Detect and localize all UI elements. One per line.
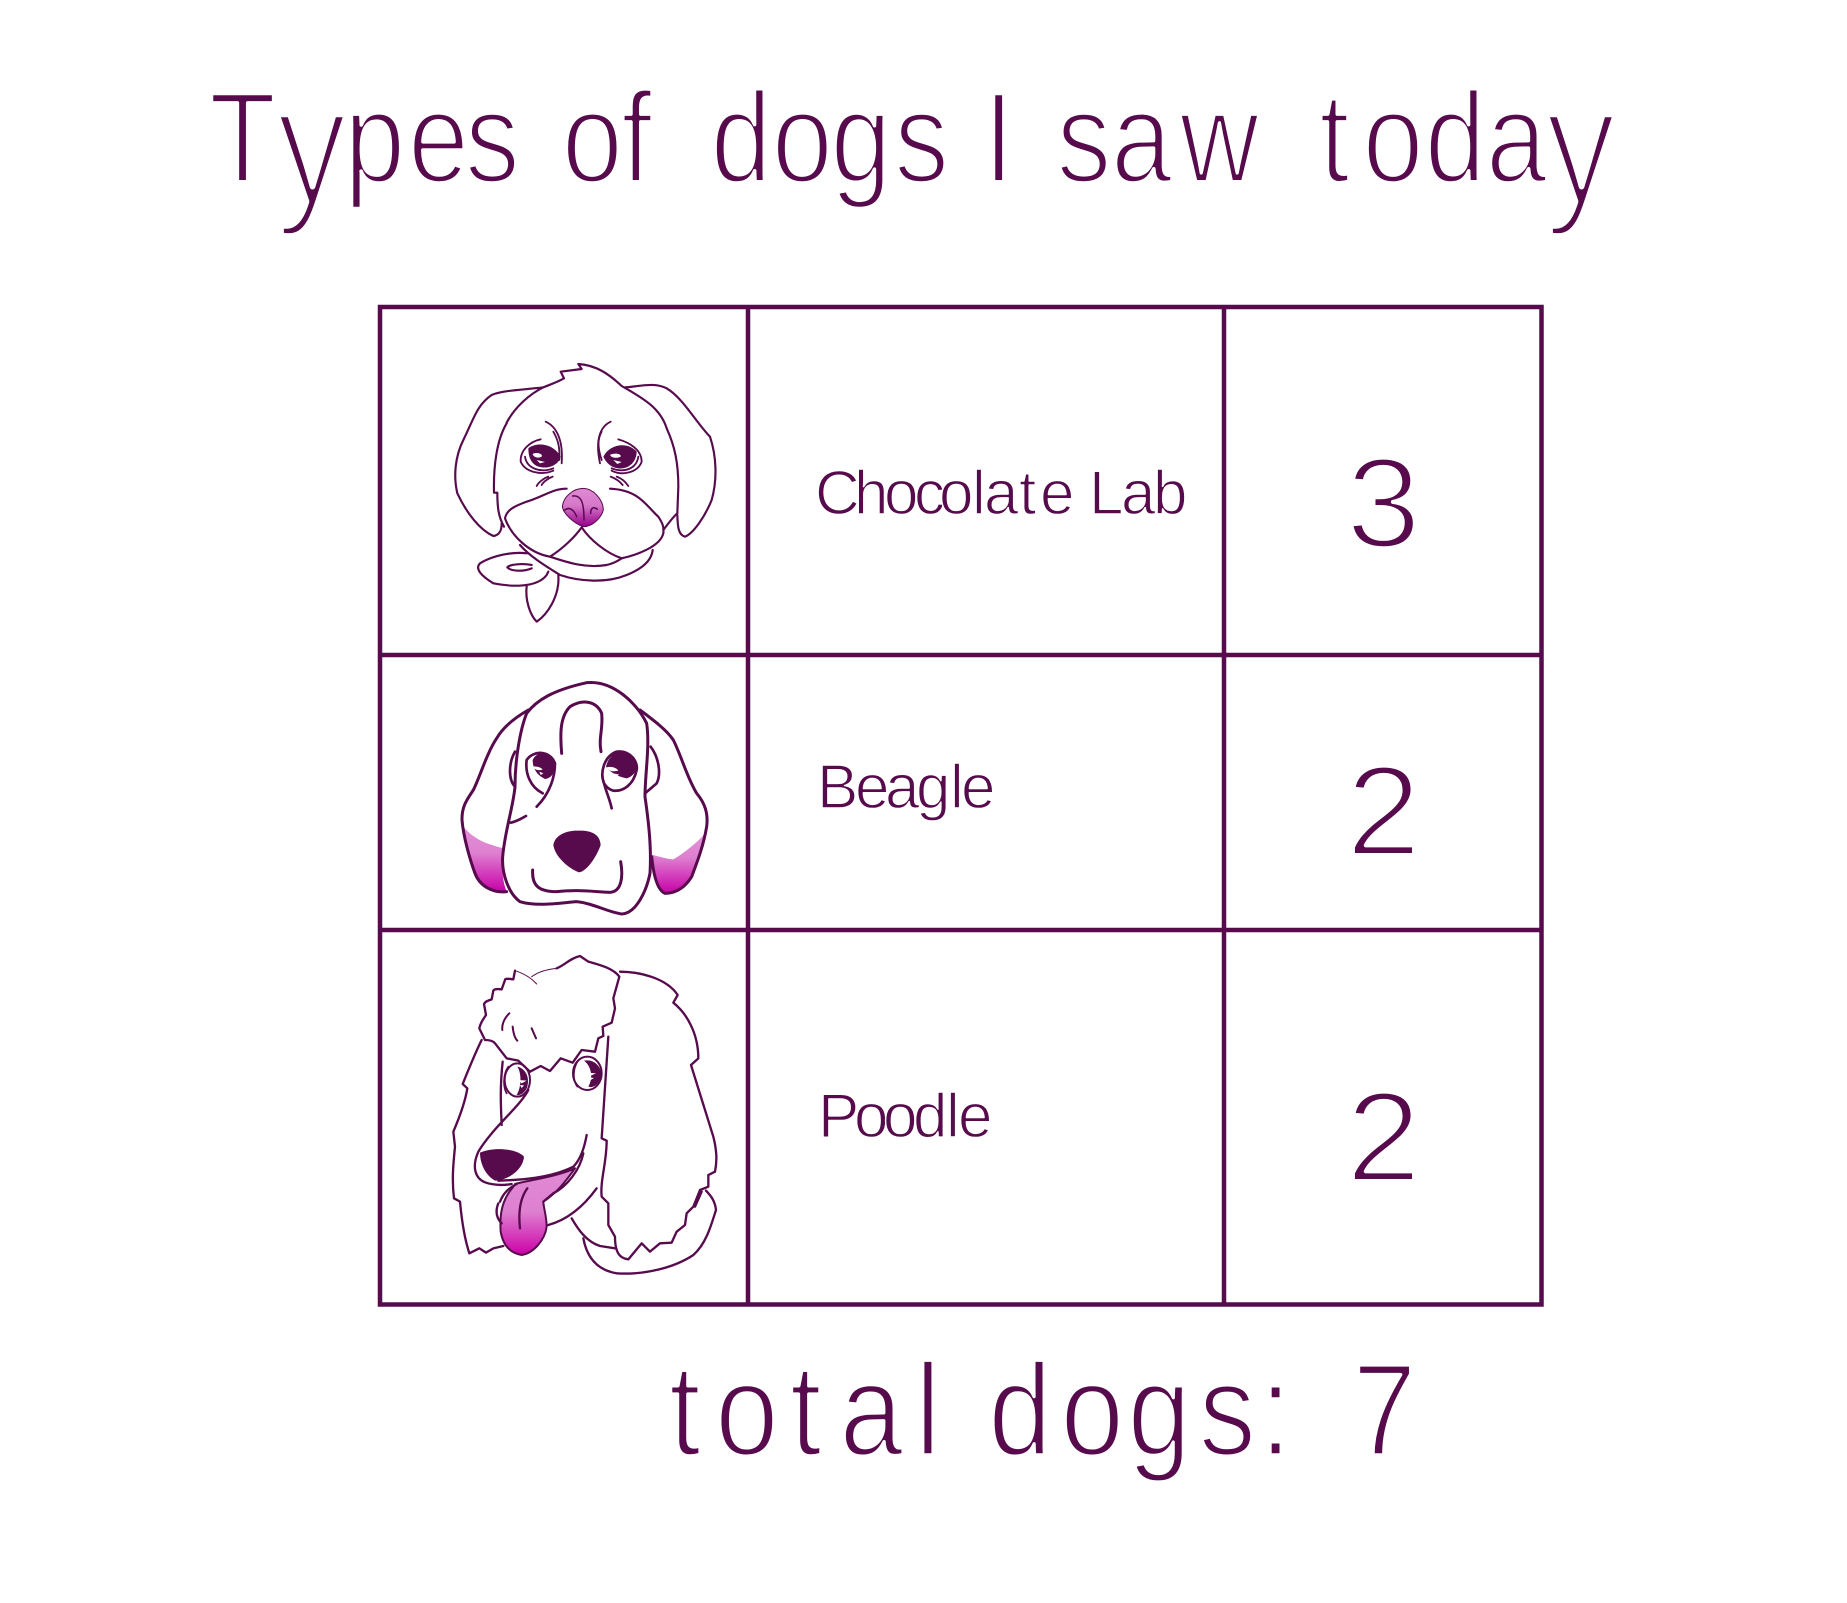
count: 2: 2 — [1346, 739, 1421, 882]
total dogs footer: total dogs: 7 — [669, 1338, 1416, 1484]
row: Poodle — [453, 956, 1421, 1274]
label: Beagle: Beagle — [817, 753, 995, 822]
title: y — [1545, 51, 1617, 238]
title: y — [276, 51, 348, 238]
count: 3: 3 — [1346, 431, 1421, 574]
icon: Chocolate Lab dog head — [455, 364, 715, 622]
row: Beagle — [462, 682, 1421, 914]
label: Chocolate Lab: Chocolate Lab — [815, 459, 1187, 528]
table grid — [380, 307, 1542, 1304]
row: Chocolate Lab — [455, 364, 1421, 622]
table — [380, 307, 1542, 1304]
icon: Poodle dog head — [453, 956, 716, 1274]
label: Poodle: Poodle — [818, 1082, 992, 1151]
title: T — [209, 67, 276, 210]
title: pes of dogs I saw toda — [344, 67, 1547, 210]
count: 2: 2 — [1346, 1065, 1421, 1208]
icon: Beagle dog head — [462, 682, 707, 914]
